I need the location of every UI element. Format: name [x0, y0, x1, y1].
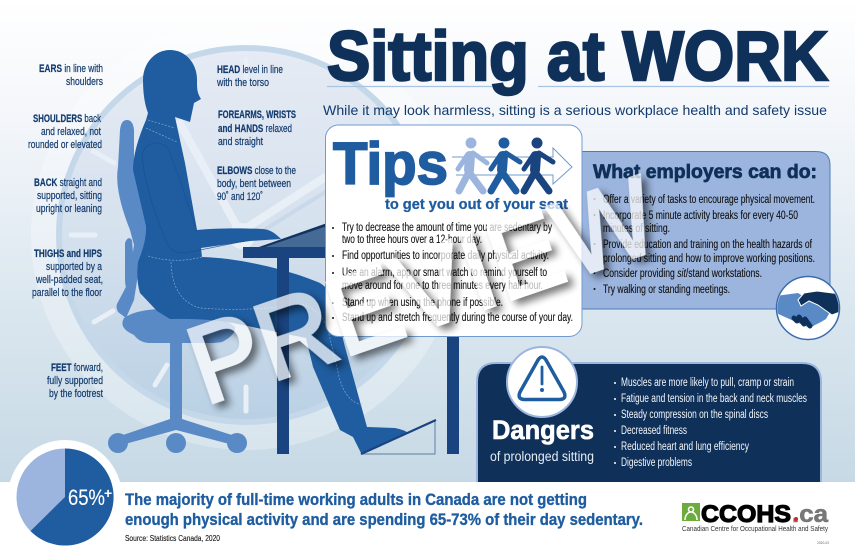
- source note: Source: Statistics Canada, 2020: [125, 533, 220, 543]
- employers list: Try walking or standing meetings.: [603, 284, 730, 296]
- posture labels, left: SHOULDERS back: [33, 113, 101, 125]
- posture labels, left: [28, 63, 103, 400]
- dangers list: [614, 377, 807, 469]
- posture labels, right: with the torso: [216, 77, 269, 89]
- tips list: move around for one to three minutes every half hour.: [342, 280, 543, 292]
- posture labels, right: HEAD level in line: [217, 64, 283, 76]
- footer statement: [125, 490, 643, 529]
- posture labels, left: BACK straight and: [34, 177, 102, 189]
- tips list: two to three hours over a 12-hour day.: [342, 234, 482, 246]
- posture labels, left: THIGHS and HIPS: [34, 248, 102, 260]
- pie chart 65%: 65%: [68, 485, 105, 510]
- document code: 2020-03: [817, 541, 829, 545]
- tips heading: Tips: [333, 131, 448, 197]
- pie chart 65%: +: [104, 485, 112, 501]
- pie chart 65%: [8, 440, 122, 554]
- posture labels, left: upright or leaning: [36, 203, 102, 215]
- posture labels, left: parallel to the floor: [32, 287, 102, 299]
- posture labels, right: [216, 64, 296, 203]
- employers heading: What employers can do:: [593, 162, 817, 183]
- logo: CCOHS: CCOHS: [701, 501, 791, 528]
- dangers list: Decreased fitness: [621, 425, 687, 437]
- seated person silhouette: [133, 50, 408, 453]
- subtitle: While it may look harmless, sitting is a serious workplace health and safety issue: [323, 102, 827, 118]
- employers list: [594, 194, 815, 296]
- dangers list: Muscles are more likely to pull, cramp or strain: [621, 377, 794, 389]
- tips list: Stand up and stretch frequently during the course of your day.: [342, 312, 573, 324]
- posture labels, right: body, bent between: [217, 178, 291, 190]
- tips list: Try to decrease the amount of time you are sedentary by: [342, 222, 552, 234]
- tips list: Find opportunities to incorporate daily physical activity.: [342, 250, 549, 262]
- tips list: Stand up when using the phone if possible.: [342, 297, 503, 309]
- title: Sitting at WORK: [327, 17, 828, 95]
- dangers subheading: of prolonged sitting: [490, 449, 594, 464]
- tips list: Use an alarm, app or smart watch to remind yourself to: [342, 267, 547, 279]
- panel: what employers can do: [560, 152, 830, 309]
- logo: CCOHS: .ca: [792, 501, 829, 528]
- clock graphic: [31, 20, 461, 450]
- posture labels, right: and HANDS relaxed: [218, 123, 292, 135]
- posture labels, left: supported by a: [46, 261, 103, 273]
- watermark: PREVIEW: PREVIEW: [173, 153, 672, 428]
- dangers list: Reduced heart and lung efficiency: [621, 441, 749, 453]
- icon: handshake: [776, 276, 840, 340]
- icon: warning triangle: [507, 347, 577, 417]
- panel: tips: [326, 125, 582, 336]
- posture labels, right: ELBOWS close to the: [217, 165, 296, 177]
- footer statement: The majority of full-time working adults in Canada are not getting: [125, 490, 587, 509]
- posture labels, left: fully supported: [47, 375, 103, 387]
- posture labels, left: shoulders: [66, 76, 103, 88]
- dangers list: Digestive problems: [621, 457, 692, 469]
- posture labels, right: and straight: [218, 136, 263, 148]
- posture labels, left: well-padded seat,: [35, 274, 103, 286]
- employers list: Consider providing sit/stand workstations.: [603, 268, 762, 280]
- footer statement: enough physical activity and are spending 65-73% of their day sedentary.: [125, 510, 643, 529]
- tips list: [332, 222, 573, 324]
- posture labels, left: supported, sitting: [37, 190, 102, 202]
- posture labels, left: by the footrest: [49, 388, 103, 400]
- panel: dangers: [477, 347, 821, 484]
- icon: walking figures and arrow: [452, 138, 572, 191]
- desk: [243, 222, 459, 454]
- posture labels, right: FOREARMS, WRISTS: [218, 109, 296, 121]
- footrest: [361, 420, 436, 454]
- posture labels, left: rounded or elevated: [28, 139, 102, 151]
- logo: CCOHS: [682, 501, 829, 533]
- dangers heading: Dangers: [492, 415, 594, 445]
- tips subheading: to get you out of your seat: [385, 197, 568, 213]
- employers list: minutes of sitting.: [603, 223, 670, 235]
- posture labels, right: 90˚ and 120˚: [217, 191, 263, 203]
- dangers list: Steady compression on the spinal discs: [621, 409, 768, 421]
- posture labels, left: FEET forward,: [51, 362, 103, 374]
- logo: CCOHS: Canadian Centre for Occupational Health and Safety: [682, 526, 828, 533]
- posture labels, left: and relaxed, not: [41, 126, 101, 138]
- office chair: [108, 120, 247, 453]
- footer band: [0, 482, 855, 554]
- posture labels, left: EARS in line with: [39, 63, 103, 75]
